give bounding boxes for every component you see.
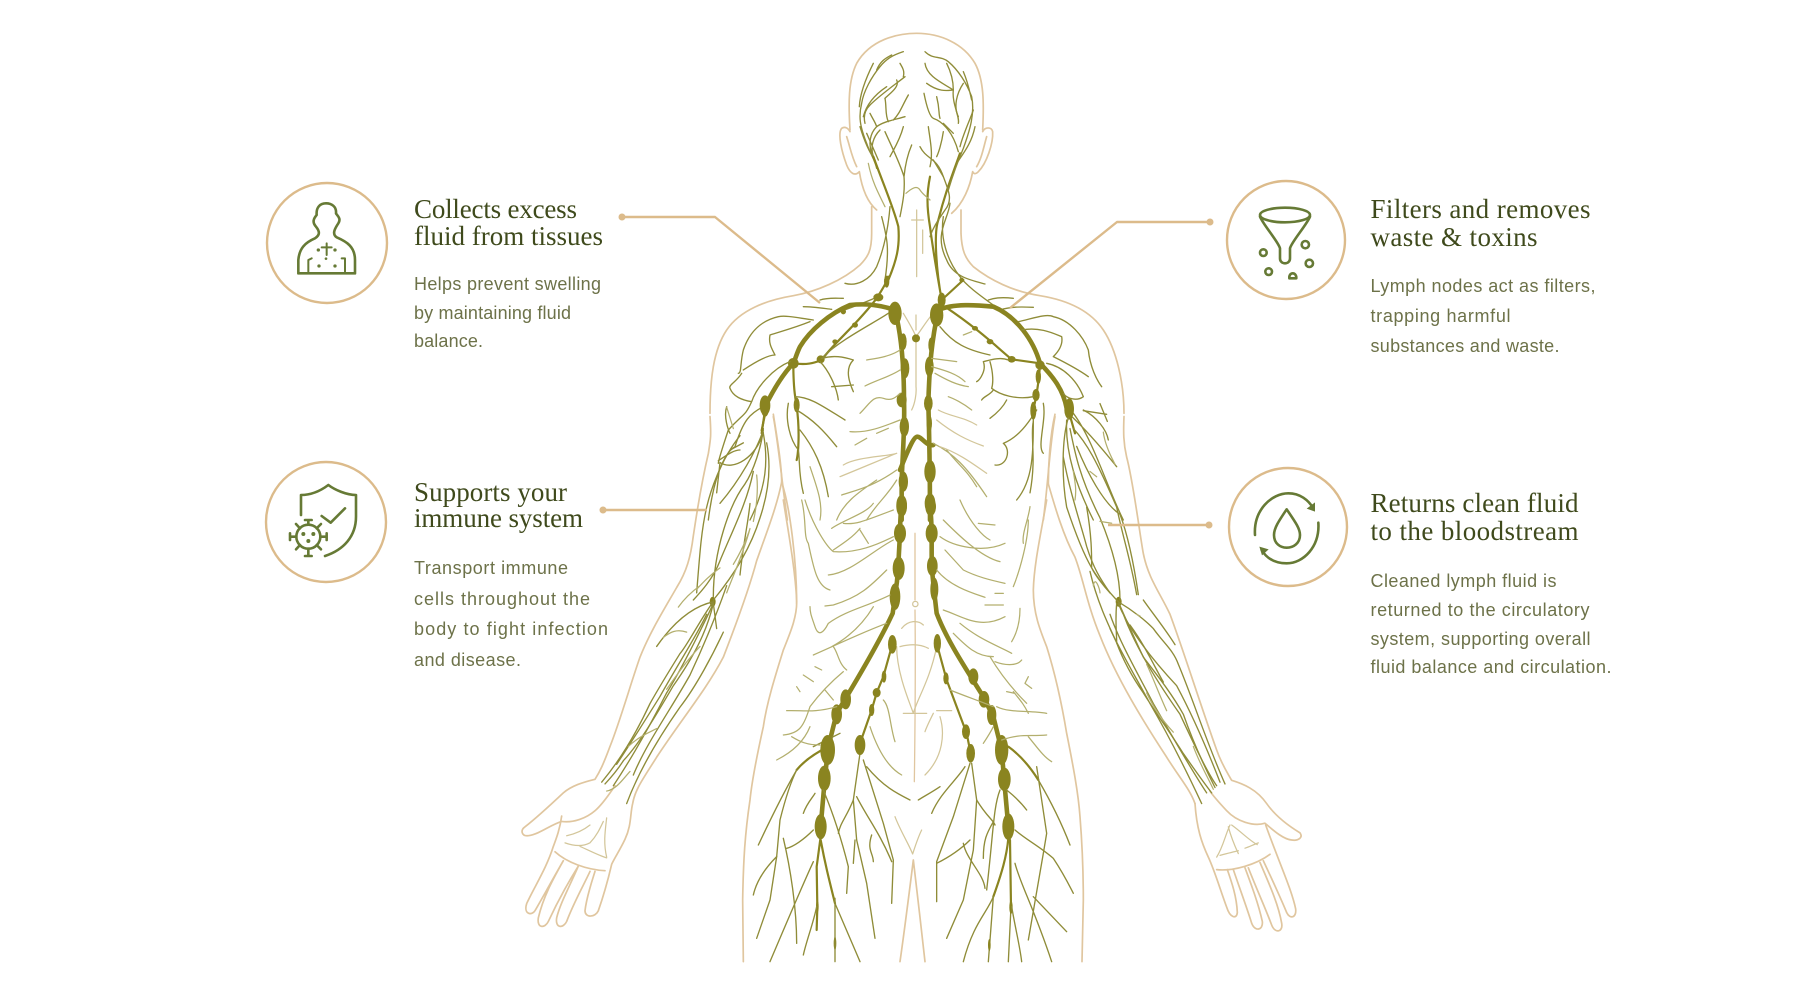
description [1370, 276, 1596, 356]
description: fluid balance and circulation. [1370, 657, 1612, 677]
description [414, 558, 608, 670]
panel: filters and removes [1010, 181, 1596, 356]
heading [1370, 194, 1590, 252]
heading: Returns clean fluid [1370, 488, 1579, 518]
description: and disease. [414, 650, 521, 670]
lymph vessels and nodes [602, 52, 1225, 962]
heading [414, 477, 583, 533]
icon: person with lymph points [267, 183, 387, 303]
heading: to the bloodstream [1370, 516, 1578, 546]
connector [618, 214, 820, 303]
heading [1370, 488, 1579, 546]
heading [414, 194, 603, 251]
description: Helps prevent swelling [414, 274, 601, 294]
panel: returns clean fluid [1108, 468, 1612, 677]
icon: funnel [1227, 181, 1345, 299]
description: by maintaining fluid [414, 303, 571, 323]
heading: Filters and removes [1370, 194, 1590, 224]
connector [1010, 218, 1214, 308]
panel: supports immune system [266, 462, 707, 670]
heading: Collects excess [414, 194, 577, 224]
heading: immune system [414, 503, 583, 533]
body outline [522, 33, 1301, 962]
description: Lymph nodes act as filters, [1370, 276, 1596, 296]
description [414, 274, 601, 351]
panel: collects excess fluid [267, 183, 820, 351]
connector [1108, 522, 1212, 528]
description: Transport immune [414, 558, 568, 578]
description: substances and waste. [1370, 336, 1560, 356]
description: balance. [414, 331, 483, 351]
human body lymphatic illustration [522, 33, 1301, 962]
description: cells throughout the [414, 589, 590, 609]
connector [600, 506, 707, 514]
description: returned to the circulatory [1370, 600, 1590, 620]
description: body to fight infection [414, 619, 608, 639]
heading: waste & toxins [1370, 222, 1538, 252]
icon: shield with virus [266, 462, 386, 582]
heading: Supports your [414, 477, 567, 507]
description: system, supporting overall [1370, 629, 1590, 649]
description: trapping harmful [1370, 306, 1510, 326]
description: Cleaned lymph fluid is [1370, 571, 1556, 591]
description [1370, 571, 1612, 677]
heading: fluid from tissues [414, 221, 603, 251]
icon: water drop with circular arrows [1229, 468, 1347, 586]
